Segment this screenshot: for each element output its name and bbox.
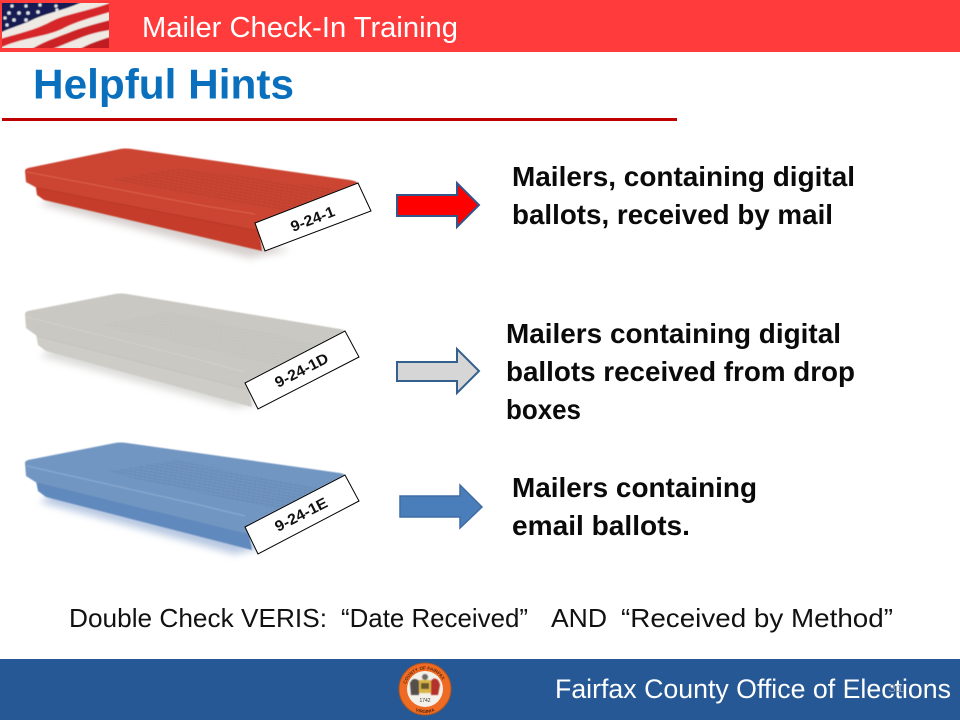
icon: county seal: VIRGINIA	[416, 708, 435, 713]
label: 9-24-1D: 9-24-1D	[272, 350, 332, 392]
callout: VERIS reminder: “Date Received”	[341, 603, 528, 633]
row: blue tray	[25, 442, 757, 554]
text: mail mailers: Mailers, containing digital	[512, 161, 855, 192]
icon: county seal: 1742	[419, 698, 431, 704]
icon: red tray	[25, 148, 358, 258]
row: red tray	[25, 148, 855, 258]
header title: Mailer Check-In Training	[142, 12, 458, 44]
icon: county seal: COUNTY OF FAIRFAX	[404, 666, 445, 684]
text: mail mailers: ballots, received by mail	[512, 199, 833, 230]
text: drop box mailers: Mailers containing digital	[506, 318, 841, 349]
text: email mailers: email ballots.	[512, 510, 690, 541]
arrow: red	[397, 183, 479, 227]
header bar	[0, 0, 960, 52]
arrow: gray	[397, 349, 479, 393]
footer bar	[0, 659, 960, 720]
text: email mailers: Mailers containing	[512, 472, 757, 503]
arrow: blue	[400, 485, 482, 528]
text: drop box mailers: ballots received from drop	[506, 356, 855, 387]
label: 9-24-1: 9-24-1	[288, 203, 337, 236]
icon: gray tray	[25, 294, 345, 408]
callout: VERIS reminder: AND	[551, 603, 607, 633]
callout: VERIS reminder: Double Check VERIS:	[69, 603, 327, 633]
label: 9-24-1	[255, 183, 371, 251]
row: gray tray	[25, 294, 855, 425]
page number: 31	[888, 683, 904, 695]
label: 9-24-1D	[245, 331, 359, 409]
icon: American flag	[2, 3, 109, 48]
heading: Helpful Hints: Helpful Hints	[33, 60, 294, 108]
label: 9-24-1E: 9-24-1E	[272, 495, 331, 536]
label: 9-24-1E	[245, 475, 359, 554]
text: drop box mailers: boxes	[506, 394, 581, 425]
icon: blue tray	[25, 442, 345, 554]
callout: VERIS reminder: “Received by Method”	[621, 603, 893, 633]
footer text: Fairfax County Office of Elections	[555, 674, 951, 704]
icon: county seal	[398, 662, 452, 716]
